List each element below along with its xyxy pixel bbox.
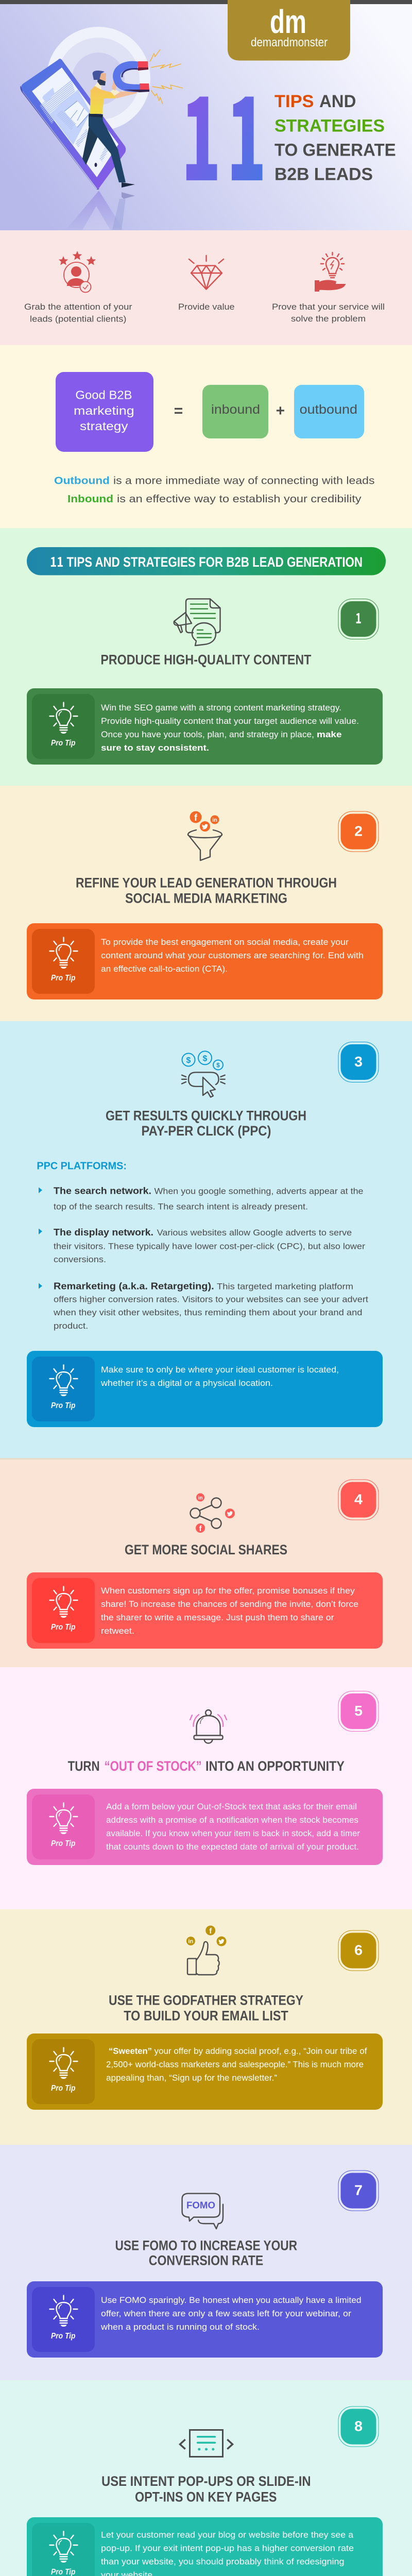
tip text: whether it’s a digital or a physical location. <box>100 1378 273 1388</box>
icon: pop-up window <box>180 2430 233 2456</box>
pro tip label <box>32 694 95 759</box>
panel: tip 3 <box>0 1021 412 1458</box>
icon: attention <box>59 251 96 293</box>
heading <box>115 2238 297 2268</box>
title: TO GENERATE <box>274 140 396 160</box>
list item: display network: conversions. <box>54 1255 106 1264</box>
number badge 8: 8 <box>354 2418 363 2434</box>
panel: tip 6 <box>0 1909 412 2145</box>
title: STRATEGIES <box>274 116 385 135</box>
number badge 1 <box>338 599 379 639</box>
tip text: Make sure to only be where your ideal customer is located, <box>101 1365 339 1375</box>
list item: search network: top of the search results. The search intent is already present. <box>54 1201 308 1211</box>
tip text: address with a promise of a notification when the stock becomes <box>106 1815 358 1825</box>
heading <box>106 1108 306 1139</box>
icon: pay per click: $ <box>216 1061 220 1069</box>
panel: hero <box>0 0 412 230</box>
icon: share: in <box>198 1495 203 1501</box>
tip text: make <box>317 730 342 739</box>
number badge 6: 6 <box>354 1942 363 1958</box>
panel: tip 5 <box>0 1667 412 1909</box>
logo: demandmonster <box>228 0 350 61</box>
icon: pay per click <box>182 1051 225 1097</box>
top bar <box>0 0 412 4</box>
box: outbound <box>294 385 364 438</box>
icon: thumbs up <box>186 1926 227 1975</box>
number badge 1: 1 <box>355 607 362 628</box>
section banner: 11 TIPS AND STRATEGIES FOR B2B LEAD GENERATION <box>50 551 363 571</box>
logo: demandmonster: demandmonster <box>251 36 328 49</box>
heading <box>68 1758 345 1774</box>
tip text: “Sweeten” <box>109 2046 152 2056</box>
heading: GET MORE SOCIAL SHARES <box>125 1542 287 1557</box>
heading <box>101 2473 311 2504</box>
number badge 7: 7 <box>354 2182 363 2198</box>
heading: USE INTENT POP-UPS OR SLIDE-IN <box>101 2473 311 2489</box>
pro tip label <box>32 1357 95 1421</box>
pro tip label <box>32 1578 95 1643</box>
heading: SOCIAL MEDIA MARKETING <box>125 890 287 906</box>
title <box>274 92 396 184</box>
tip text: appealing than, “Sign up for the newsletter.” <box>106 2073 277 2082</box>
box: good B2B marketing strategy <box>56 372 153 452</box>
tip text: retweet. <box>101 1626 134 1636</box>
icon: pay per click: $ <box>186 1056 191 1065</box>
heading: GET RESULTS QUICKLY THROUGH <box>106 1108 306 1123</box>
icon: bulb and hand <box>315 252 346 292</box>
box: inbound <box>202 385 268 438</box>
heading: PAY-PER CLICK (PPC) <box>141 1123 271 1139</box>
heading: TURN <box>68 1758 100 1774</box>
list item: search network: When you google something, adverts appear at the <box>154 1186 364 1196</box>
tip text <box>101 2530 354 2576</box>
equals sign: = <box>174 402 183 419</box>
tip text: When customers sign up for the offer, promise bonuses if they <box>101 1586 355 1596</box>
panel: marketing equation <box>0 345 412 528</box>
heading <box>109 1992 303 2024</box>
number badge 8 <box>338 2406 379 2447</box>
pro tip label: Pro Tip <box>51 1623 75 1632</box>
text: outbound explanation: is a more immediate way of connecting with leads <box>113 474 375 486</box>
text: grab attention: Grab the attention of your <box>24 302 132 312</box>
heading: USE FOMO TO INCREASE YOUR <box>115 2238 297 2253</box>
tip text: To provide the best engagement on social media, create your <box>101 937 349 947</box>
list item: remarketing: Remarketing (a.k.a. Retargeting). <box>54 1280 214 1291</box>
text: provide value: Provide value <box>178 302 235 312</box>
list item: remarketing: offers higher conversion rates. Visitors to your websites can see your advert <box>54 1294 368 1304</box>
tip text: than your website, you should probably think of redesigning <box>101 2556 344 2567</box>
icon: thumbs up: f <box>209 1927 212 1936</box>
icon: fomo chat bubbles: FOMO <box>186 2200 215 2211</box>
text: prove service: solve the problem <box>291 314 366 324</box>
panel: tip 8 <box>0 2380 412 2576</box>
icon: social media funnel <box>188 811 222 860</box>
list item: remarketing: when they visit other websites, thus reminding them about your brand and <box>53 1308 362 1317</box>
pro tip label: Pro Tip <box>51 2332 75 2341</box>
pro tip label: Pro Tip <box>51 2084 75 2093</box>
tip text: that counts down to the expected date of arrival of your product. <box>106 1842 359 1852</box>
pro tip label: Pro Tip <box>51 739 75 748</box>
heading: “OUT OF STOCK” <box>105 1758 202 1774</box>
tip text: content around what your customers are searching for. End with <box>101 951 364 960</box>
list item: remarketing <box>39 1280 368 1331</box>
panel: tip 4 <box>0 1460 412 1667</box>
title: TIPS <box>274 92 314 111</box>
tip text <box>101 1586 358 1636</box>
list item: display network: their visitors. These typically have lower cost-per-click (CPC), but also lower <box>54 1242 365 1251</box>
pro tip card <box>27 1351 383 1427</box>
number badge 3: 3 <box>354 1054 363 1070</box>
illustration: man with magnet on tablet <box>20 27 183 230</box>
pro tip label: Pro Tip <box>51 974 75 982</box>
list item: search network <box>39 1185 364 1211</box>
list item: remarketing: product. <box>54 1321 88 1331</box>
heading <box>76 875 337 906</box>
tip text <box>100 2295 362 2332</box>
tip text: 2,500+ world-class marketers and salespeople.” This is much more <box>106 2060 364 2069</box>
icon: bell <box>190 1710 227 1743</box>
list item: display network: Various websites allow Google adverts to serve <box>157 1228 352 1238</box>
pro tip label: Pro Tip <box>51 1839 75 1848</box>
pro tip label <box>32 2287 95 2352</box>
pro tip label <box>32 1794 95 1859</box>
icon: fomo chat bubbles <box>182 2194 223 2229</box>
icon: share <box>191 1493 235 1533</box>
heading: INTO AN OPPORTUNITY <box>205 1758 345 1774</box>
text: outbound explanation: Outbound <box>54 474 110 486</box>
pro tip card <box>27 688 383 765</box>
icon: thumbs up: in <box>188 1938 194 1944</box>
tip text: Once you have your tools, plan, and strategy in place, <box>101 730 314 739</box>
heading: USE THE GODFATHER STRATEGY <box>109 1992 303 2008</box>
tip text: your offer by adding social proof, e.g., “Join our tribe of <box>154 2046 367 2056</box>
tip text <box>101 937 364 974</box>
tip text: an effective call-to-action (CTA). <box>101 964 228 974</box>
box: good B2B marketing strategy: marketing <box>74 404 134 417</box>
number badge 5 <box>338 1691 379 1731</box>
box: good B2B marketing strategy: strategy <box>80 419 128 433</box>
pro tip card <box>27 2517 383 2576</box>
tip text: Win the SEO game with a strong content marketing strategy. <box>101 703 341 713</box>
number badge 4 <box>338 1480 379 1520</box>
icon: diamond <box>189 256 224 290</box>
tip text <box>101 703 359 753</box>
number badge 2 <box>338 811 379 852</box>
list item: display network <box>39 1227 365 1264</box>
tip text: Let your customer read your blog or website before they see a <box>101 2530 354 2540</box>
heading: TO BUILD YOUR EMAIL LIST <box>124 2008 288 2024</box>
section banner <box>27 547 386 575</box>
pro tip card <box>27 923 383 999</box>
pro tip card <box>27 2033 383 2110</box>
heading: OPT-INS ON KEY PAGES <box>135 2489 277 2504</box>
title: B2B LEADS <box>274 164 373 184</box>
tip text: Add a form below your Out-of-Stock text that asks for their email <box>106 1802 357 1811</box>
box: inbound: inbound <box>211 402 260 417</box>
tip text <box>106 1802 360 1852</box>
box: good B2B marketing strategy: Good B2B <box>75 388 132 402</box>
icon: pay per click: $ <box>203 1054 208 1063</box>
box: outbound: outbound <box>300 402 357 417</box>
tip text <box>106 2046 367 2082</box>
pro tip label <box>32 929 95 994</box>
pro tip label: Pro Tip <box>51 1401 75 1410</box>
pro tip card <box>27 2281 383 2358</box>
number badge 4: 4 <box>354 1491 363 1507</box>
pro tip card <box>27 1572 383 1649</box>
tip text: when a product is running out of stock. <box>100 2322 260 2332</box>
text: grab attention <box>24 302 132 324</box>
icon: social media funnel: f <box>194 812 198 823</box>
tip text: Provide high-quality content that your target audience will value. <box>101 716 359 726</box>
panel: three lead steps <box>0 230 412 345</box>
pro tip label <box>32 2039 95 2104</box>
text: prove service <box>272 302 385 324</box>
tip text: sure to stay consistent. <box>101 743 209 753</box>
heading: REFINE YOUR LEAD GENERATION THROUGH <box>76 875 337 891</box>
panel: tip 7 <box>0 2145 412 2380</box>
text: prove service: Prove that your service will <box>272 302 385 312</box>
list item: display network: The display network. <box>54 1227 153 1238</box>
icon: share: f <box>199 1524 202 1533</box>
heading: PRODUCE HIGH-QUALITY CONTENT <box>100 652 311 668</box>
text: grab attention: leads (potential clients) <box>30 314 127 324</box>
tip text: available. If you know when your item is back in stock, add a timer <box>106 1828 360 1838</box>
icon: social media funnel: in <box>212 817 217 823</box>
tip text: share! To increase the chances of sending the invite, don’t force <box>101 1599 358 1609</box>
number badge 3 <box>338 1042 379 1082</box>
panel: tip 2 <box>0 786 412 1021</box>
logo: demandmonster: dm <box>270 3 306 40</box>
big number 11: 11 <box>181 50 266 213</box>
list item: remarketing: This targeted marketing platform <box>217 1281 353 1291</box>
tip text <box>100 1365 339 1388</box>
number badge 2: 2 <box>354 823 363 839</box>
tip text: offer, when there are only a few seats left for your webinar, or <box>101 2309 351 2318</box>
icon: document, megaphone, speech bubble <box>174 599 220 646</box>
plus sign: + <box>276 402 285 419</box>
tip text: the sharer to write a message. Just push them to share or <box>101 1613 334 1622</box>
tip text: pop-up. If your exit intent pop-up has a higher conversion rate <box>101 2543 354 2553</box>
number badge 5: 5 <box>354 1703 363 1719</box>
heading: CONVERSION RATE <box>149 2252 263 2268</box>
number badge 6 <box>338 1930 379 1971</box>
tip text: Use FOMO sparingly. Be honest when you actually have a limited <box>101 2295 362 2305</box>
title: AND <box>319 92 356 111</box>
text: inbound explanation: Inbound <box>67 493 113 505</box>
subheading: ppc platforms: PPC PLATFORMS: <box>37 1160 127 1172</box>
pro tip label <box>32 2523 95 2576</box>
panel: tip 1 <box>0 528 412 786</box>
number badge 7 <box>338 2171 379 2211</box>
text: inbound explanation: is an effective way to establish your credibility <box>117 493 362 505</box>
list item: search network: The search network. <box>54 1185 151 1196</box>
pro tip card <box>27 1789 383 1865</box>
